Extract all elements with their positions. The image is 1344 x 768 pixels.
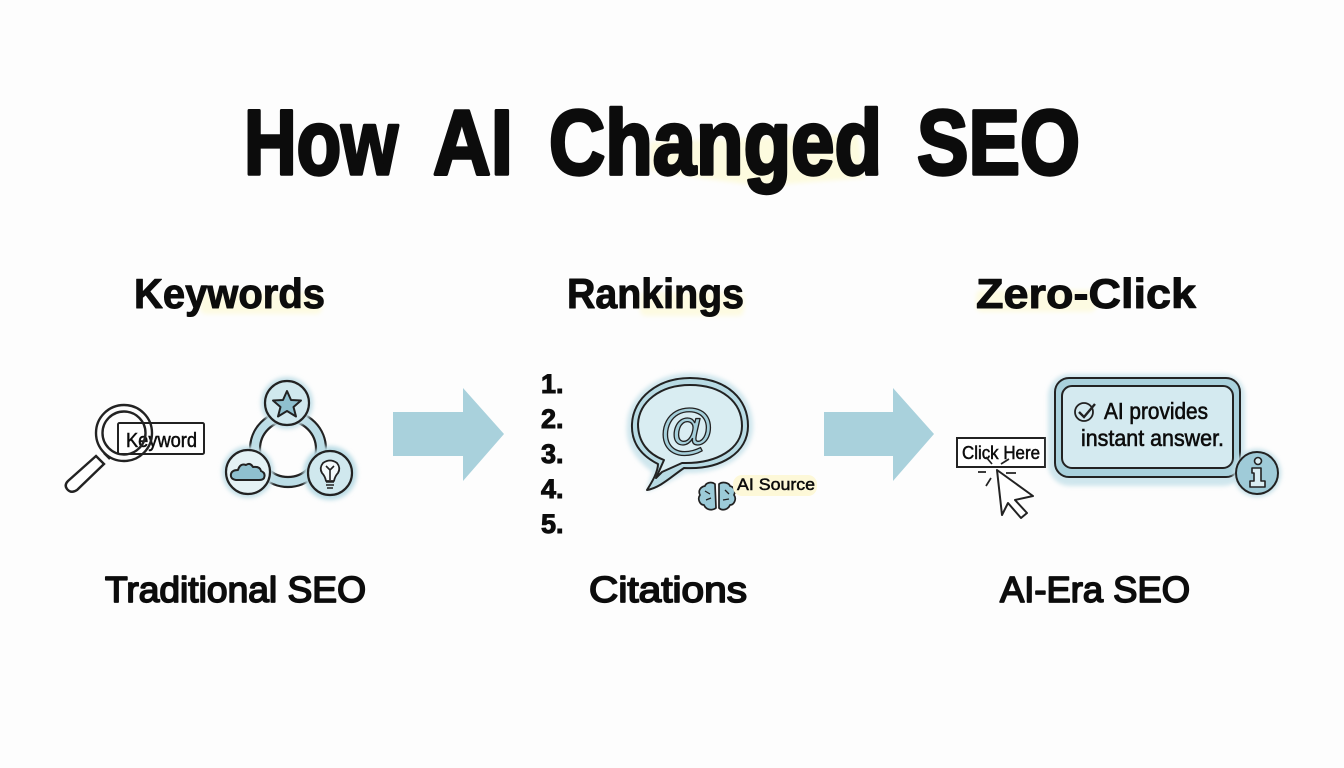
label: Traditional SEO: Traditional SEO (105, 569, 366, 610)
arrow: keywords to rankings (393, 388, 504, 481)
title (244, 92, 1080, 194)
heading: Zero-Click: Zero-Click (976, 270, 1197, 317)
numbered list 1 to 5: 4. (541, 474, 564, 504)
title: SEO (917, 92, 1080, 194)
label: Citations: Citations (589, 569, 747, 610)
magnifier (66, 405, 152, 492)
title: How (244, 92, 398, 194)
heading: Keywords: Keywords (134, 270, 325, 317)
heading: Rankings: Rankings (567, 270, 744, 317)
icon: brain (699, 483, 735, 510)
numbered list 1 to 5: 3. (541, 439, 564, 469)
icon: info badge (1233, 449, 1281, 497)
callout: AI Source: AI Source (737, 475, 815, 494)
keyword box: Keyword (126, 430, 197, 452)
panel: AI answer card (1048, 374, 1245, 486)
star node (261, 377, 313, 429)
label: AI-Era SEO: AI-Era SEO (1000, 569, 1190, 610)
cloud node (222, 446, 274, 498)
icon: speech bubble with at sign (627, 373, 753, 492)
icon: mouse cursor with click sparks (978, 457, 1033, 518)
connecting ring (250, 411, 326, 487)
numbered list 1 to 5: 5. (541, 509, 564, 539)
title: AI (433, 92, 513, 194)
icon: magnifying glass over keyword box (66, 405, 204, 492)
icon: check badge (1075, 403, 1095, 421)
arrow: rankings to zero-click (824, 388, 934, 481)
numbered list 1 to 5 (541, 369, 564, 539)
lightbulb node (303, 446, 357, 500)
title: Changed (549, 92, 882, 194)
answer text: instant answer. (1081, 425, 1224, 451)
button: Click Here (957, 438, 1045, 467)
answer text (1081, 398, 1224, 451)
numbered list 1 to 5: 2. (541, 404, 564, 434)
numbered list 1 to 5: 1. (541, 369, 564, 399)
icon: connected network of star, cloud and bulb (222, 377, 357, 500)
button: Click Here: Click Here (962, 443, 1040, 463)
answer text: AI provides (1104, 398, 1208, 424)
at sign: @ (660, 397, 714, 459)
